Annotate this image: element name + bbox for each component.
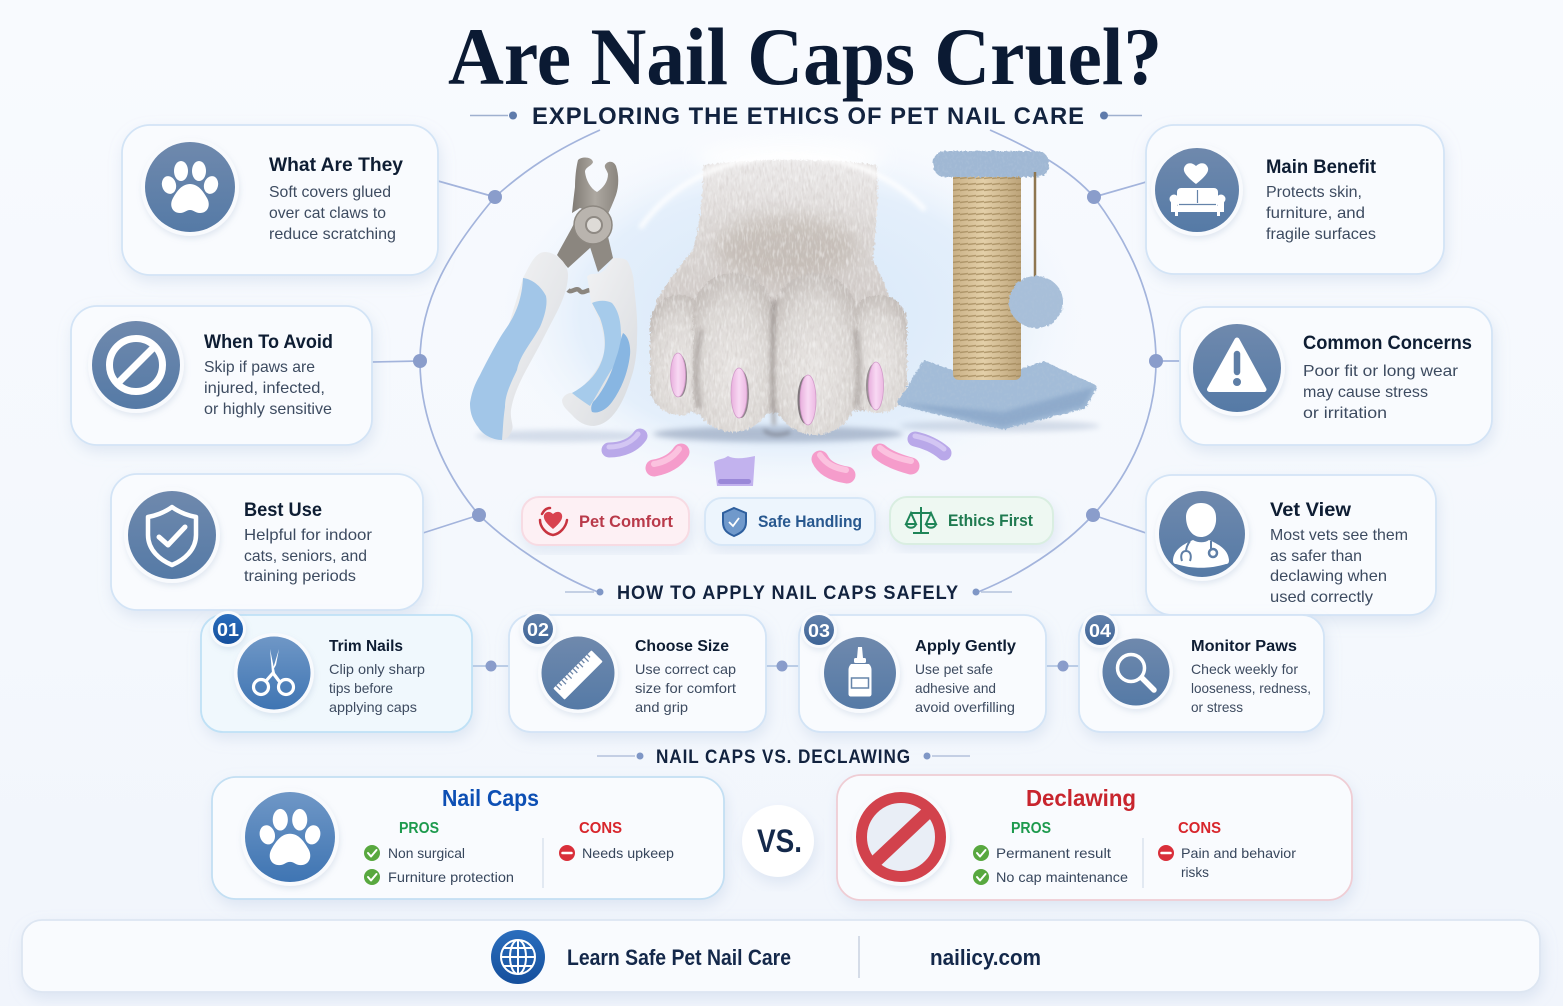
panel: Nail Caps: Non surgical xyxy=(388,845,465,861)
panel: Main Benefit: furniture, and xyxy=(1266,205,1365,222)
step 04: Monitor Paws: Check weekly for xyxy=(1191,661,1298,677)
illustration: cat paw with pink caps xyxy=(640,140,925,442)
step 02: Choose Size xyxy=(509,611,766,732)
panel: Common Concerns: or irritation xyxy=(1303,405,1387,422)
icon: magnifying glass xyxy=(1118,654,1154,690)
icon: adhesive bottle xyxy=(848,647,872,696)
icon: veterinarian xyxy=(1173,503,1229,568)
panel: Vet View: Vet View xyxy=(1270,499,1352,521)
step 03: Apply Gently: Use pet safe xyxy=(915,661,993,677)
panel: Nail Caps: Furniture protection xyxy=(388,869,514,885)
panel: Best Use: cats, seniors, and xyxy=(244,548,367,565)
step 03: Apply Gently: adhesive and xyxy=(915,680,996,696)
badge: Pet Comfort: Pet Comfort xyxy=(579,513,673,531)
panel: Main Benefit: fragile surfaces xyxy=(1266,226,1376,243)
panel: Main Benefit xyxy=(1146,125,1444,274)
badge: Safe Handling xyxy=(705,498,875,545)
VS badge: VS. xyxy=(757,823,802,859)
step 03: Apply Gently: Apply Gently xyxy=(915,638,1016,655)
panel: Declawing: Permanent result xyxy=(996,845,1111,861)
icon: globe xyxy=(501,940,535,974)
badge: 03: 03 xyxy=(808,621,830,641)
panel: Nail Caps: CONS xyxy=(579,820,622,837)
icon: check xyxy=(364,869,380,885)
panel: When To Avoid: When To Avoid xyxy=(204,331,333,353)
panel: Nail Caps xyxy=(212,777,724,899)
panel: Best Use: Helpful for indoor xyxy=(244,527,373,544)
panel: When To Avoid: or highly sensitive xyxy=(204,401,332,418)
step 04: Monitor Paws xyxy=(1079,612,1324,732)
step 04: Monitor Paws: looseness, redness, xyxy=(1191,680,1311,696)
step 03: Apply Gently xyxy=(799,612,1046,732)
badge: 01: 01 xyxy=(217,620,239,640)
panel: Declawing: PROS xyxy=(1011,820,1051,837)
panel: Vet View xyxy=(1146,475,1436,615)
icon: paw xyxy=(160,161,220,213)
icon: check xyxy=(973,869,989,885)
badge: Ethics First: Ethics First xyxy=(948,512,1033,530)
badge: 04: 04 xyxy=(1089,621,1111,641)
section heading: how to apply: HOW TO APPLY NAIL CAPS SAFELY xyxy=(617,583,959,604)
panel: Main Benefit: Protects skin, xyxy=(1266,184,1362,201)
icon: scissors xyxy=(254,649,294,694)
panel: When To Avoid: injured, infected, xyxy=(204,380,325,397)
footer bar: Learn Safe Pet Nail Care xyxy=(567,945,791,970)
title: Are Nail Caps Cruel? xyxy=(448,11,1162,102)
icon: paw xyxy=(258,809,322,865)
panel: Nail Caps: Needs upkeep xyxy=(582,845,674,861)
panel: Best Use: training periods xyxy=(244,568,356,585)
step connectors xyxy=(472,660,1079,672)
icon: prohibition sign xyxy=(110,338,162,392)
panel: Common Concerns xyxy=(1180,307,1492,445)
icon: heart over sofa xyxy=(1170,163,1226,216)
panel: Vet View: declawing when xyxy=(1270,568,1387,585)
illustration: scratching post xyxy=(900,151,1100,432)
badge: 03 xyxy=(804,615,834,645)
icon: heart xyxy=(540,508,567,535)
panel: Best Use: Best Use xyxy=(244,499,322,521)
subtitle: EXPLORING THE ETHICS OF PET NAIL CARE xyxy=(532,103,1085,130)
badge: Ethics First xyxy=(890,497,1053,544)
badge: 04 xyxy=(1085,615,1115,645)
VS badge xyxy=(742,805,814,877)
badge: 01 xyxy=(213,614,243,644)
icon: ruler xyxy=(553,650,603,700)
icon: shield check xyxy=(148,507,196,565)
circular frame with connectors xyxy=(372,130,1180,592)
panel: Declawing: Pain and behavior xyxy=(1181,845,1296,861)
step 01: Trim Nails: Trim Nails xyxy=(329,638,403,655)
step 04: Monitor Paws: Monitor Paws xyxy=(1191,638,1297,655)
icon: check xyxy=(364,845,380,861)
icon: red prohibition sign xyxy=(862,798,940,876)
panel: Declawing: No cap maintenance xyxy=(996,869,1128,885)
badge: 02: 02 xyxy=(527,620,549,640)
pink caps on claws xyxy=(670,353,884,425)
illustration: nail clipper xyxy=(470,158,645,442)
panel: What Are They: over cat claws to xyxy=(269,205,386,222)
panel: Main Benefit: Main Benefit xyxy=(1266,156,1376,178)
panel: Common Concerns: may cause stress xyxy=(1303,384,1428,401)
step 04: Monitor Paws: or stress xyxy=(1191,699,1243,715)
panel: Nail Caps: PROS xyxy=(399,820,439,837)
panel: What Are They: reduce scratching xyxy=(269,226,396,243)
panel: What Are They: What Are They xyxy=(269,154,403,176)
icon: shield xyxy=(723,508,746,536)
panel: Vet View: Most vets see them xyxy=(1270,527,1408,544)
footer bar: nailicy.com xyxy=(930,945,1041,970)
panel: When To Avoid xyxy=(71,306,372,445)
footer bar xyxy=(22,920,1540,992)
panel: Nail Caps: Nail Caps xyxy=(442,785,539,811)
step 01: Trim Nails: tips before xyxy=(329,680,393,696)
icon: minus xyxy=(559,845,575,861)
panel: What Are They: Soft covers glued xyxy=(269,184,391,201)
panel: Common Concerns: Common Concerns xyxy=(1303,332,1472,354)
panel: Vet View: as safer than xyxy=(1270,548,1362,565)
icon: check xyxy=(973,845,989,861)
panel: What Are They xyxy=(122,125,438,275)
panel: When To Avoid: Skip if paws are xyxy=(204,359,315,376)
badge: Safe Handling: Safe Handling xyxy=(758,513,862,531)
illustration: loose nail caps xyxy=(609,434,944,486)
step 02: Choose Size: and grip xyxy=(635,699,688,715)
section heading: comparison: NAIL CAPS VS. DECLAWING xyxy=(656,747,911,768)
badge: Pet Comfort xyxy=(522,497,689,545)
panel: Vet View: used correctly xyxy=(1270,589,1373,606)
step 03: Apply Gently: avoid overfilling xyxy=(915,699,1015,715)
icon: balance scale xyxy=(906,507,936,533)
panel: Best Use xyxy=(111,474,423,610)
step 02: Choose Size: Choose Size xyxy=(635,638,729,655)
panel: Declawing: CONS xyxy=(1178,820,1221,837)
badge: 02 xyxy=(523,614,553,644)
panel: Declawing: Declawing xyxy=(1026,785,1136,811)
panel: Declawing xyxy=(837,775,1352,900)
icon: warning triangle xyxy=(1210,340,1264,390)
step 02: Choose Size: size for comfort xyxy=(635,680,736,696)
panel: Declawing: risks xyxy=(1181,864,1209,880)
step 02: Choose Size: Use correct cap xyxy=(635,661,736,677)
step 01: Trim Nails: applying caps xyxy=(329,699,417,715)
panel: Common Concerns: Poor fit or long wear xyxy=(1303,363,1459,380)
step 01: Trim Nails: Clip only sharp xyxy=(329,661,425,677)
step 01: Trim Nails xyxy=(201,611,472,732)
icon: minus xyxy=(1158,845,1174,861)
